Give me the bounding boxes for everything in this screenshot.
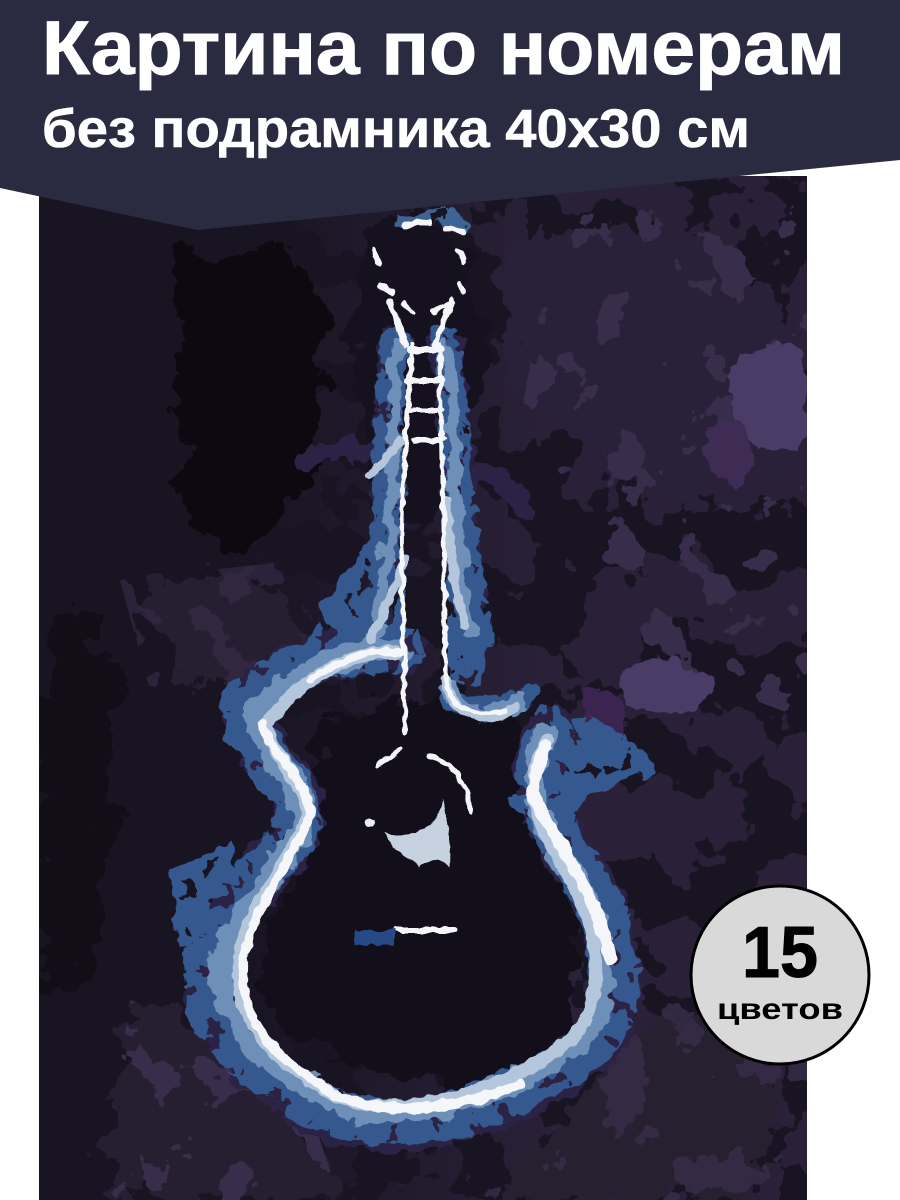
badge: 15 colours [691,886,869,1064]
subtitle: без подрамника 40х30 см [42,99,750,159]
smoke background [32,176,812,1200]
guitar glow: purple-navy halo [210,340,615,1126]
guitar glow: blue patches [205,216,645,1123]
badge: 15 colours: цветов [717,993,843,1026]
sound hole and bridge detail [355,798,450,945]
header banner [0,0,900,230]
guitar glow: pale blue [238,440,596,1106]
guitar outline: white strokes [243,222,610,1108]
guitar glow: neck fan and shoulder blue [170,500,650,960]
badge: 15 colours: 15 [742,913,818,993]
title: Картина по номерам [42,6,845,91]
guitar glow: mid blue patches [222,345,603,1113]
painting: guitar on dark background [32,176,812,1200]
